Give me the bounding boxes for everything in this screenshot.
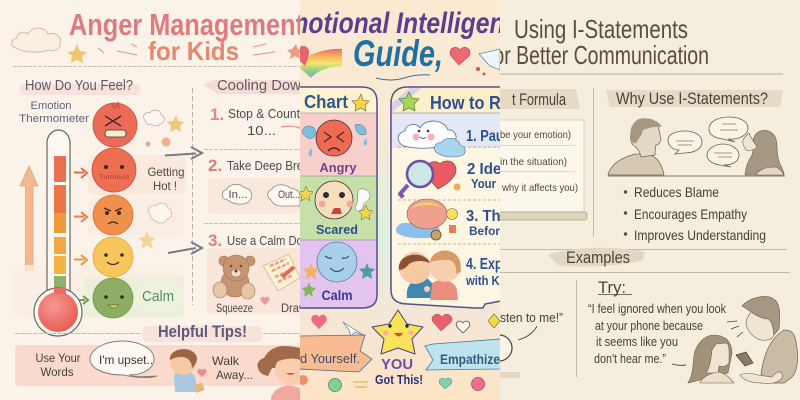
heading: examples: Examples (566, 248, 630, 267)
icon: heart (197, 369, 207, 377)
illustration: boy walking (170, 349, 205, 393)
arrow: orange (74, 212, 87, 222)
list: benefits (624, 184, 766, 243)
illustration: two people talking (608, 117, 785, 176)
example: try quote: “I feel ignored when you look (588, 302, 727, 316)
speech bubble (668, 131, 702, 154)
step 2: deep breaths (208, 160, 300, 214)
step 2: identify (467, 161, 539, 191)
illustration: woman and man with phone (688, 297, 798, 384)
icon: drawing pad (263, 254, 300, 291)
arrow: amber (74, 255, 87, 265)
title: for kids: for Kids (148, 36, 239, 66)
heading: how do you feel: How Do You Feel? (25, 77, 133, 94)
icon: heart (450, 47, 470, 65)
icon: steam cloud (144, 110, 164, 126)
tip: walk away: Away... (216, 368, 253, 382)
step 1: stop and count (211, 108, 300, 135)
icon: paper plane (343, 322, 365, 336)
icon: heart (439, 378, 452, 389)
arrow: to step 1-2 (165, 147, 202, 159)
speech bubble: I'm upset.. (99, 353, 153, 367)
icon: heart (432, 314, 452, 331)
step 2: deep breaths: In... (228, 189, 248, 201)
step 1: stop and count: 10... (247, 123, 276, 138)
icon: diamond star (488, 314, 500, 328)
icon: flower (328, 378, 342, 392)
step 2: deep breaths: Out... (278, 189, 300, 201)
label: emotion thermometer (19, 101, 89, 122)
panel: emotion chart (299, 87, 377, 308)
face: okay (93, 237, 133, 277)
icon: heart (260, 297, 270, 305)
icon: star (138, 231, 156, 249)
label: getting hot: Hot ! (153, 179, 177, 193)
example: instead-of quote: sten to me!” (500, 311, 563, 325)
list: benefits: Reduces Blame (634, 184, 719, 200)
icon: star (399, 92, 419, 111)
label: getting hot (148, 168, 184, 190)
heading: i-statement formula: t Formula (512, 90, 566, 109)
label: scared: Scared (316, 222, 358, 237)
step 1: stop and count: Stop & Count (228, 107, 301, 121)
face: angry (302, 120, 367, 157)
label: angry: Angry (320, 160, 357, 175)
icon: flower (472, 378, 484, 390)
icon: star (67, 44, 87, 63)
label: emotion thermometer: Thermometer (19, 113, 89, 125)
title: emotional intelligence: Emotional Intelligence (270, 7, 532, 40)
step 4: express: with Kindness (465, 274, 542, 288)
card: statement formula: why it affects you) (501, 182, 578, 194)
tip: use your words: Words (40, 365, 74, 379)
arrow: to step 3 (168, 242, 202, 254)
speech bubble (709, 117, 748, 142)
label: calm: Calm (142, 288, 174, 305)
band: getting hot (88, 155, 186, 195)
icon: paper plane (479, 49, 500, 70)
icon: rainbow (300, 49, 342, 78)
label: you got this: YOU (381, 356, 413, 373)
face: calm (93, 278, 133, 318)
step 2: identify: 2 Identify (467, 161, 533, 178)
card: statement formula: in the situation) (500, 156, 567, 168)
card: statement formula (490, 120, 587, 220)
banner: calm yourself (299, 335, 372, 372)
step 3: calm down kit: Draw (281, 303, 308, 315)
step 2: identify: Your Feeling (471, 177, 539, 191)
step 3: think: 3. Think (466, 208, 522, 225)
band: angry row (88, 198, 184, 236)
example: instead-of quote (486, 311, 563, 378)
list: benefits: Improves Understanding (634, 227, 766, 243)
tip: walk away: Walk (212, 354, 240, 368)
panel: i-statements (486, 0, 800, 400)
icon: star (352, 94, 369, 111)
title: guide: Guide, (353, 33, 443, 74)
face: getting hot (92, 148, 136, 192)
arrow: red (74, 168, 87, 178)
step 2: deep breaths: Take Deep Breaths (227, 158, 325, 173)
step 3: calm down kit (207, 234, 300, 314)
illustration: girl (257, 346, 305, 400)
icon: accent star (287, 44, 300, 59)
label: you got this: Got This! (375, 373, 423, 387)
icon: flower (298, 375, 308, 385)
panel: how to regulate (391, 87, 558, 308)
banner: empathize: Empathize (440, 351, 500, 367)
arrow: green (79, 296, 88, 304)
face: very angry (93, 103, 137, 147)
example: try quote: don't hear me.” (594, 352, 666, 366)
step 2: deep breaths: 2. (208, 156, 222, 175)
icon: up arrow (20, 166, 38, 271)
chart: thermometer (34, 130, 82, 336)
step 4: express (465, 256, 542, 288)
face: calm (302, 242, 375, 297)
tip: use your words (36, 351, 81, 379)
heading: cooling down: Cooling Down (217, 77, 309, 94)
heading: why use i-statements: Why Use I-Statements? (616, 89, 768, 108)
heading: try: Try: (598, 278, 626, 297)
step 3: calm down kit: Squeeze (216, 303, 253, 315)
face: angry (93, 195, 133, 235)
panel: tips band (15, 341, 305, 400)
banner: empathize (425, 339, 501, 370)
title: for better communication: for Better Communication (488, 40, 709, 70)
band: calm zone (25, 265, 34, 272)
heading: how to regulate: How to Regulate (430, 93, 558, 113)
label: getting hot: Getting (148, 165, 184, 179)
face: scared (299, 181, 373, 220)
example: try quote: it seems like you (596, 335, 678, 349)
step 1: pause: 1. Pause (466, 128, 518, 145)
icon: teddy bear (213, 255, 255, 299)
face: getting hot: Turmoud (99, 175, 129, 181)
icon: happy cloud (398, 121, 465, 157)
icon: cloud (12, 28, 60, 52)
step 3: calm down kit: Use a Calm Down (227, 233, 317, 248)
label: calm: Calm (322, 287, 352, 303)
panel: emotional intelligence guide (270, 0, 558, 400)
heading: helpful tips: Helpful Tips! (158, 323, 247, 341)
step 3: calm down kit: 3. (208, 231, 222, 250)
icon: heart (311, 315, 327, 329)
step 1: stop and count: 1. (210, 105, 224, 124)
list: benefits: Encourages Empathy (634, 206, 747, 222)
icon: steam cloud (149, 203, 172, 223)
heading: cooling down (204, 79, 300, 94)
band: calm highlight (136, 283, 184, 309)
speech bubble (707, 144, 739, 167)
icon: magnifier and heart (399, 161, 460, 197)
step 3: think: Before You Act (469, 224, 553, 238)
icon: star (167, 115, 184, 132)
icon: brain and lightbulb (396, 199, 458, 240)
banner: calm yourself: d Yourself. (300, 351, 360, 366)
example: try quote: at your phone because (595, 319, 703, 333)
title: anger management: Anger Management (69, 7, 304, 42)
icon: kids hugging (399, 250, 461, 300)
example: try quote (588, 302, 727, 366)
panel: anger management for kids (11, 14, 300, 400)
step 3: think (466, 208, 553, 238)
card: statement formula: be your emotion) (500, 129, 571, 141)
label: you got this (375, 356, 423, 387)
icon: heart outline (456, 321, 470, 333)
icon: star mascot (372, 310, 423, 354)
icon: heart (299, 46, 309, 66)
step 4: express: 4. Express (466, 256, 528, 273)
speech bubble (90, 341, 157, 377)
label: emotion thermometer: Emotion (30, 100, 72, 112)
tip: walk away (212, 354, 253, 382)
title: using i-statements: Using I-Statements (514, 14, 688, 44)
tip: use your words: Use Your (36, 351, 81, 365)
heading: chart: Chart (304, 92, 348, 112)
